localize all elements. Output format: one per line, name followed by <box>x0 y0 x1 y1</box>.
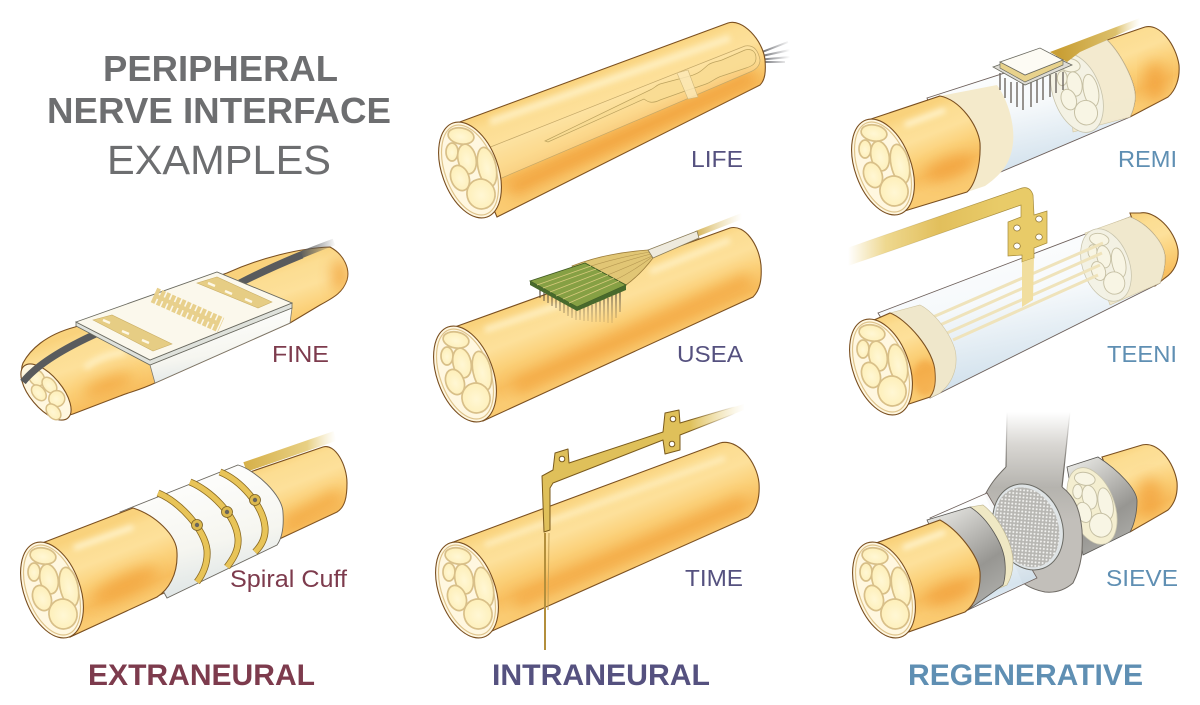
electrode probe <box>545 49 756 142</box>
white sleeve <box>648 231 699 258</box>
translucent shank over nerve <box>544 533 546 650</box>
sleeve band <box>677 70 698 99</box>
orange shading <box>515 280 750 388</box>
LIFE nerve interface <box>427 22 790 227</box>
near beige band <box>940 85 1013 192</box>
translucent channel lines <box>488 46 760 180</box>
far nerve segment <box>1130 213 1178 286</box>
needle pins <box>1000 72 1063 110</box>
orange shading <box>510 75 755 190</box>
nerve body <box>457 22 765 217</box>
electrode needles <box>540 290 620 323</box>
cut end <box>427 113 513 227</box>
cut end <box>422 317 508 431</box>
dark lead right <box>240 242 334 283</box>
grey metal plate <box>985 412 1082 592</box>
label: Spiral Cuff: Spiral Cuff <box>230 566 347 593</box>
orange shading <box>913 360 937 396</box>
TIME nerve interface <box>424 404 759 650</box>
transparent tube left <box>930 493 1037 610</box>
near nerve segment <box>858 313 935 408</box>
column heading: EXTRANEURAL: EXTRANEURAL <box>88 659 315 692</box>
cut end <box>841 533 927 647</box>
white cuff <box>120 465 283 598</box>
near beige band <box>970 505 1013 592</box>
plate edge <box>1006 412 1070 487</box>
gold lead <box>1050 18 1142 62</box>
dark lead left <box>23 332 100 382</box>
cut end <box>838 310 924 424</box>
orange shading <box>922 575 978 611</box>
highlight <box>485 458 725 545</box>
cuff plate edge <box>76 303 292 365</box>
label: REMI: REMI <box>1118 146 1177 172</box>
tab holes <box>559 416 676 462</box>
far grey band <box>1067 457 1137 555</box>
title: EXAMPLES <box>107 137 331 183</box>
green electrode array <box>530 263 626 307</box>
TEENI nerve interface <box>838 188 1178 424</box>
cut end <box>840 110 926 224</box>
lead wires <box>757 42 790 62</box>
array base plate <box>993 50 1072 85</box>
orange shading <box>515 502 745 602</box>
orange shading <box>81 259 348 400</box>
highlight <box>903 532 945 548</box>
title <box>47 48 391 183</box>
far inner end <box>1071 222 1141 308</box>
sieve disk <box>981 474 1075 580</box>
orange shading <box>88 561 162 609</box>
USEA nerve interface <box>422 216 761 431</box>
orange shading <box>922 150 978 186</box>
FINE nerve interface <box>12 242 348 428</box>
label: USEA: USEA <box>677 341 744 367</box>
nerve body <box>452 228 761 421</box>
label: FINE: FINE <box>272 341 329 367</box>
column heading: INTRANEURAL: INTRANEURAL <box>492 659 710 692</box>
contact pad left <box>93 315 172 351</box>
flex ribbon with tabs <box>542 404 744 532</box>
REMI nerve interface <box>840 18 1179 224</box>
column heading: REGENERATIVE: REGENERATIVE <box>908 659 1143 692</box>
transparent tube <box>878 217 1165 398</box>
label: SIEVE: SIEVE <box>1106 565 1178 591</box>
array chip side <box>1000 60 1063 82</box>
far beige band <box>1085 217 1165 305</box>
flattened cut end <box>12 356 80 428</box>
cut end <box>9 533 95 647</box>
flattened nerve body <box>22 247 348 415</box>
far beige band <box>1067 40 1135 132</box>
gold lead <box>696 216 742 234</box>
highlight <box>74 527 133 548</box>
far orange shading <box>1144 62 1166 102</box>
Spiral Cuff nerve interface <box>9 436 347 647</box>
cut end <box>424 533 510 647</box>
wire fan <box>572 250 653 285</box>
transparent tube <box>927 40 1135 188</box>
far orange shading <box>1137 478 1163 518</box>
white cuff side <box>150 308 292 383</box>
nerve body <box>37 447 347 637</box>
label: LIFE: LIFE <box>691 146 743 172</box>
far nerve segment <box>1102 445 1177 532</box>
near beige band <box>890 305 956 398</box>
gold spiral bands <box>158 472 265 582</box>
near grey band <box>927 507 1005 610</box>
highlight <box>905 110 945 125</box>
highlight <box>490 38 730 122</box>
far orange shading <box>285 495 340 525</box>
nerve body <box>448 442 759 635</box>
title: PERIPHERAL <box>103 48 338 89</box>
pad holes <box>1014 216 1042 249</box>
contact comb centre <box>154 295 221 325</box>
array chip top <box>1000 48 1063 75</box>
contact pad right <box>197 277 272 308</box>
near nerve segment <box>868 96 980 213</box>
highlight <box>85 352 125 368</box>
flex ribbon with pad <box>845 188 1047 267</box>
far inner end <box>1057 461 1127 551</box>
label: TEENI: TEENI <box>1107 341 1177 367</box>
label: TIME: TIME <box>685 565 743 591</box>
SIEVE nerve interface <box>841 412 1177 647</box>
translucent stem <box>1022 258 1034 307</box>
near nerve segment <box>37 508 177 637</box>
bond pads <box>192 494 260 530</box>
title: NERVE INTERFACE <box>47 90 391 131</box>
near nerve segment <box>865 520 980 635</box>
highlight <box>485 240 730 330</box>
far nerve segment <box>1107 27 1179 117</box>
cuff plate top <box>76 272 292 360</box>
wire traces <box>933 243 1103 340</box>
far inner end <box>1041 46 1113 140</box>
gold lead <box>245 436 335 467</box>
